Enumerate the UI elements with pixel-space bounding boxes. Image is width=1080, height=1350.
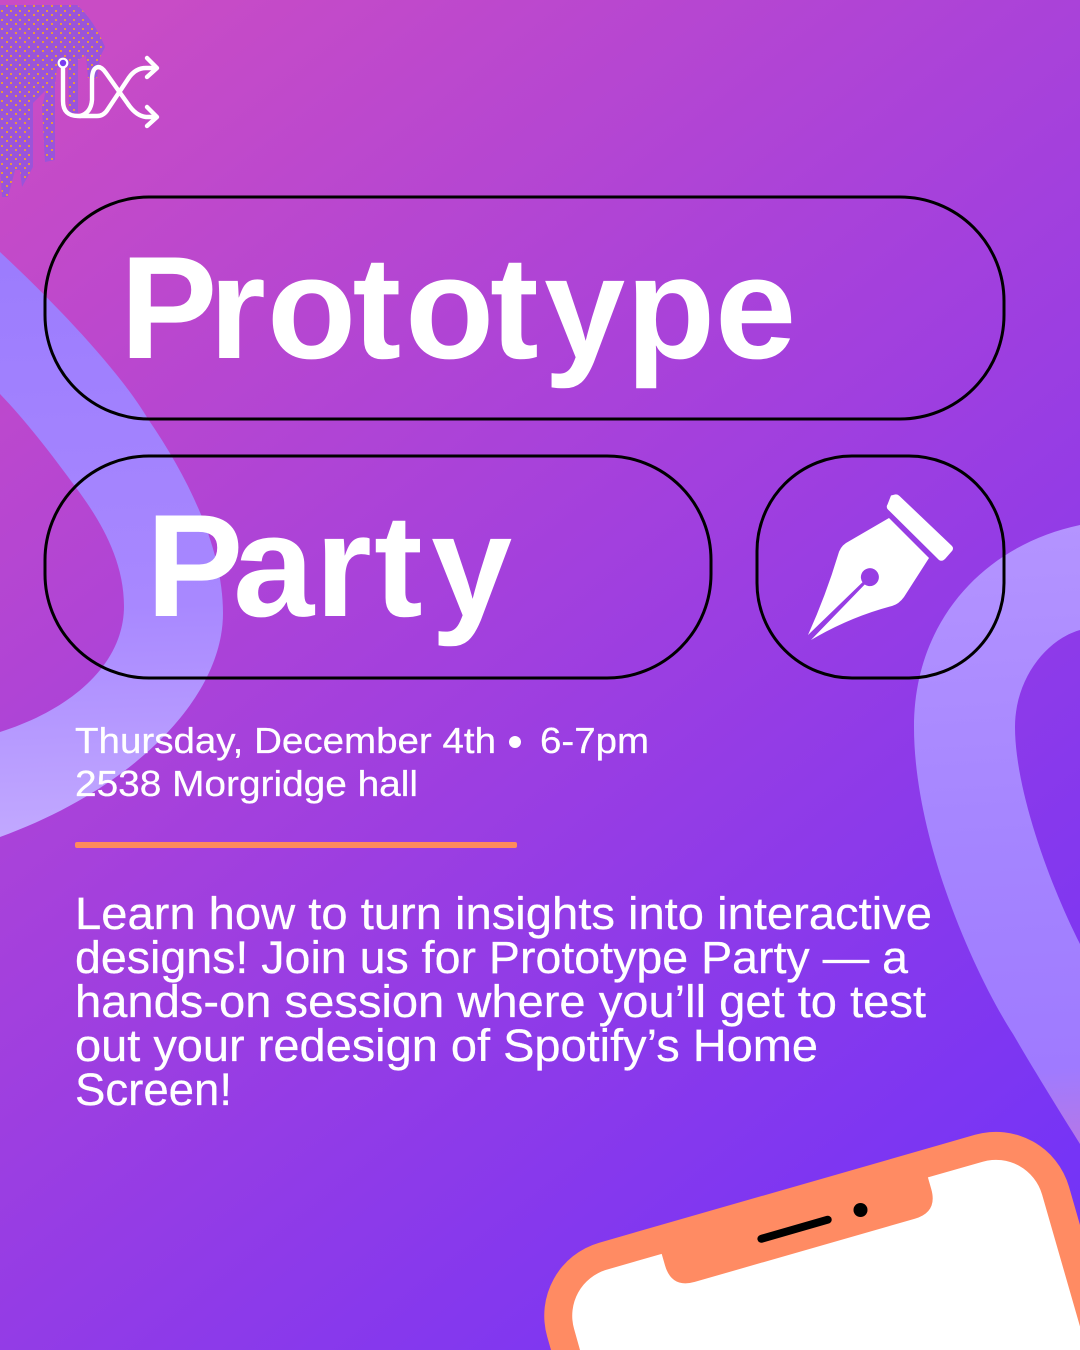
description paragraph: Learn how to turn insights into interactive <box>75 888 932 939</box>
title: Party: Party <box>146 484 512 647</box>
phone screen with notch <box>572 1160 1080 1350</box>
pill: Party title <box>45 456 711 678</box>
left translucent ribbon <box>0 252 223 837</box>
orange divider <box>75 842 517 848</box>
event date and location: Thursday, December 4th <box>75 720 496 761</box>
dotted paint drip texture <box>0 5 105 197</box>
icon: pen nib <box>808 494 953 640</box>
description paragraph: out your redesign of Spotify’s Home <box>75 1020 818 1071</box>
logo: UX mark with arrows <box>59 58 157 126</box>
phone illustration <box>544 1132 1080 1350</box>
title: Prototype: Prototype <box>120 226 796 389</box>
pill: Prototype title <box>45 197 1004 419</box>
description paragraph: designs! Join us for Prototype Party — a <box>75 932 909 983</box>
right translucent ribbon <box>914 525 1080 1144</box>
phone body <box>544 1132 1080 1350</box>
phone speaker <box>761 1220 828 1239</box>
description paragraph: Screen! <box>75 1064 232 1115</box>
event date and location: 6-7pm <box>540 720 649 761</box>
description paragraph: hands-on session where you’ll get to test <box>75 976 927 1027</box>
description paragraph <box>75 888 932 1115</box>
event date and location <box>75 720 649 804</box>
phone camera <box>854 1203 868 1217</box>
pill: pen tool icon <box>757 456 1004 678</box>
event date and location: 2538 Morgridge hall <box>75 763 418 804</box>
